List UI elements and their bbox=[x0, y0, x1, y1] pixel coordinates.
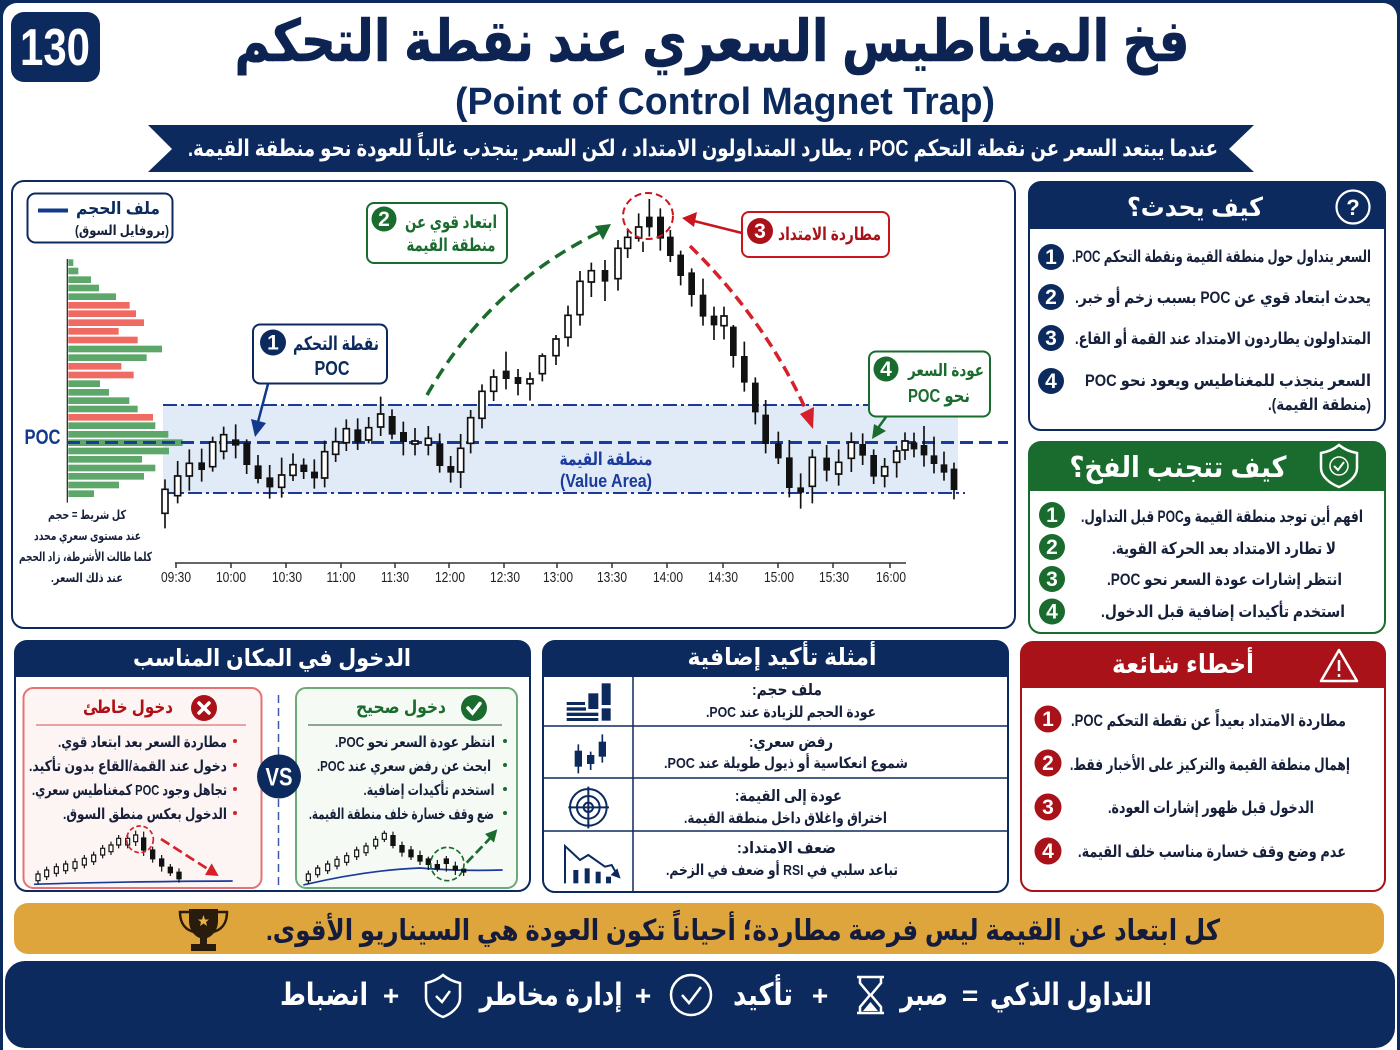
wrong entry card bbox=[24, 688, 262, 888]
item 2 bbox=[1038, 284, 1371, 310]
formula bar: التداول الذكي bbox=[990, 977, 1152, 1013]
profile note bbox=[19, 508, 153, 585]
formula bar: انضباط bbox=[280, 977, 368, 1012]
value area label: (Value Area) bbox=[560, 471, 652, 491]
callout 4: return towards POC: 4 bbox=[880, 358, 892, 381]
item 4 bbox=[1034, 838, 1346, 864]
header bbox=[1021, 642, 1385, 688]
item 3: 3 bbox=[1046, 568, 1058, 591]
wrong entry bullets: مطاردة السعر بعد ابتعاد قوي. bbox=[58, 734, 227, 752]
wrong entry mini chart bbox=[34, 826, 233, 884]
item 3: الدخول قبل ظهور إشارات العودة. bbox=[1108, 799, 1314, 818]
correct entry bullets bbox=[309, 734, 507, 823]
value area band bbox=[163, 405, 958, 493]
time axis: 11:00 bbox=[326, 570, 356, 586]
item 4: 4 bbox=[1042, 840, 1054, 863]
callout 2: strong move away: ابتعاد قوي عن bbox=[405, 212, 497, 233]
formula bar: تأكيد bbox=[733, 974, 793, 1012]
item 2: يحدث ابتعاد قوي عن POC بسبب زخم أو خبر. bbox=[1075, 287, 1371, 308]
row 4: weak extension: تباعد سلبي في RSI أو ضعف في الزخم. bbox=[666, 860, 898, 879]
row 1: volume profile bbox=[567, 682, 876, 721]
time axis: 14:00 bbox=[653, 570, 683, 586]
item 3 bbox=[1034, 794, 1314, 820]
row 4: weak extension: ضعف الامتداد: bbox=[737, 840, 836, 857]
value area label: منطقة القيمة bbox=[560, 449, 652, 469]
header bbox=[1029, 182, 1385, 229]
header: أخطاء شائعة bbox=[1112, 647, 1254, 679]
legend: volume profile: ملف الحجم bbox=[76, 199, 160, 218]
item 4 bbox=[1039, 598, 1345, 624]
formula bar: صبر bbox=[898, 977, 948, 1013]
callout 2: strong move away bbox=[367, 203, 507, 263]
row 1: volume profile: عودة الحجم للزيادة عند POC. bbox=[706, 704, 876, 721]
callout 1: POC: نقطة التحكم bbox=[293, 334, 379, 355]
panel: common mistakes bbox=[1021, 642, 1385, 891]
wrong entry bullets: تجاهل وجود POC كمغناطيس سعري. bbox=[32, 782, 227, 800]
row 3: return to value: عودة إلى القيمة: bbox=[735, 788, 842, 805]
POC line and value area boundaries bbox=[67, 405, 1008, 493]
callout 3: chasing the extension: 3 bbox=[754, 220, 766, 243]
header bbox=[1029, 442, 1385, 491]
profile note: كل شريط = حجم bbox=[48, 508, 127, 522]
item 1: 1 bbox=[1045, 246, 1057, 269]
row 2: price rejection: رفض سعري: bbox=[749, 734, 833, 752]
correct entry bullets: انتظر عودة السعر نحو POC. bbox=[335, 734, 495, 751]
correct entry mini chart bbox=[303, 829, 503, 885]
item 1 bbox=[1034, 706, 1346, 732]
correct entry bullets: ضع وقف خسارة خلف منطقة القيمة. bbox=[309, 806, 494, 823]
profile note: عند ذلك السعر. bbox=[51, 571, 123, 585]
time axis: 16:00 bbox=[876, 570, 906, 586]
volume profile bars bbox=[67, 259, 183, 503]
item 1: 1 bbox=[1046, 504, 1058, 527]
formula bar: + bbox=[635, 980, 651, 1011]
header bbox=[543, 641, 1008, 677]
row 3: return to value: اختراق واغلاق داخل منطقة القيمة. bbox=[684, 810, 887, 827]
item 4: السعر ينجذب للمغناطيس ويعود نحو POC bbox=[1085, 372, 1371, 391]
icon: check circle bbox=[671, 975, 711, 1015]
icon: shield bbox=[426, 975, 460, 1017]
time axis: 13:30 bbox=[597, 570, 627, 586]
subtitle: (Point of Control Magnet Trap) bbox=[455, 81, 995, 123]
formula bar: = bbox=[962, 980, 978, 1011]
candlestick chart: second half bbox=[515, 199, 957, 509]
arrow: green dashed rise bbox=[427, 224, 611, 395]
item 2 bbox=[1034, 750, 1350, 776]
row 4: weak extension bbox=[565, 840, 898, 883]
divider and VS badge bbox=[257, 695, 301, 885]
item 3 bbox=[1038, 325, 1371, 351]
banner ribbon: عندما يبتعد السعر عن نقطة التحكم POC ، يطارد المتداولون الامتداد ، لكن السعر ينجذب غالباً للعودة نحو منطقة القيمة. bbox=[188, 132, 1218, 162]
panel: enter in the right place bbox=[15, 641, 530, 891]
callout 4: return towards POC bbox=[869, 352, 990, 439]
header: كيف يحدث؟ bbox=[1127, 192, 1264, 222]
title: فخ المغناطيس السعري عند نقطة التحكم bbox=[234, 9, 1190, 76]
callout 4: return towards POC: نحو POC bbox=[908, 386, 970, 407]
time axis: 11:30 bbox=[381, 570, 409, 586]
time axis: 10:00 bbox=[216, 570, 246, 586]
callout 3: chasing the extension bbox=[682, 212, 889, 257]
wrong entry card: دخول خاطئ bbox=[83, 697, 173, 718]
callout 2: strong move away: منطقة القيمة bbox=[406, 235, 496, 255]
item 4: استخدم تأكيدات إضافية قبل الدخول. bbox=[1101, 601, 1345, 622]
time axis: 15:30 bbox=[819, 570, 849, 586]
divider and VS badge: VS bbox=[266, 764, 292, 792]
callout 2: strong move away: 2 bbox=[378, 208, 390, 231]
correct entry card: دخول صحيح bbox=[356, 697, 446, 718]
banner ribbon bbox=[148, 125, 1254, 172]
profile note: عند مستوى سعري محدد bbox=[34, 529, 141, 543]
item 1: 1 bbox=[1042, 708, 1054, 731]
callout 3: chasing the extension: مطاردة الامتداد bbox=[778, 224, 881, 244]
row 3: return to value bbox=[568, 787, 887, 828]
item 2: 2 bbox=[1042, 752, 1054, 775]
time axis bbox=[161, 563, 906, 586]
icon: hourglass bbox=[857, 977, 884, 1013]
item 4: (منطقة القيمة). bbox=[1268, 396, 1371, 414]
time axis: 14:30 bbox=[708, 570, 738, 586]
time axis: 12:30 bbox=[490, 570, 520, 586]
formula bar: إدارة مخاطر bbox=[478, 977, 622, 1013]
arrow: red dashed decline bbox=[690, 246, 814, 429]
time axis: 10:30 bbox=[272, 570, 302, 586]
row 2: price rejection bbox=[575, 734, 908, 773]
callout 1: POC: POC bbox=[314, 358, 350, 380]
correct entry bullets: استخدم تأكيدات إضافية. bbox=[364, 780, 494, 799]
panel: main chart bbox=[12, 181, 1015, 628]
gold takeaway bar bbox=[14, 903, 1384, 954]
icon: trophy bbox=[180, 909, 227, 951]
profile note: كلما طالت الأشرطة، زاد الحجم bbox=[19, 549, 153, 564]
header: كيف تتجنب الفخ؟ bbox=[1070, 452, 1287, 484]
item 2: 2 bbox=[1046, 536, 1058, 559]
item 1 bbox=[1038, 244, 1371, 270]
formula bar bbox=[5, 961, 1395, 1048]
time axis: 15:00 bbox=[764, 570, 794, 586]
panel: how does it happen bbox=[1029, 182, 1385, 430]
item 3 bbox=[1039, 566, 1342, 592]
item 2: 2 bbox=[1045, 286, 1057, 309]
panel: how to avoid the trap bbox=[1029, 442, 1385, 633]
time axis: 13:00 bbox=[543, 570, 573, 586]
item 3: 3 bbox=[1045, 327, 1057, 350]
extension peak dashed circle bbox=[623, 193, 673, 239]
value area label bbox=[560, 449, 652, 491]
wrong entry bullets: الدخول بعكس منطق السوق. bbox=[63, 806, 227, 823]
header: أمثلة تأكيد إضافية bbox=[688, 641, 876, 671]
legend: volume profile: (بروفايل السوق) bbox=[75, 223, 169, 238]
row 2: price rejection: شموع انعكاسية أو ذيول طويلة عند POC. bbox=[664, 753, 908, 772]
item 4 bbox=[1038, 368, 1371, 414]
formula bar: + bbox=[383, 980, 399, 1011]
item 4: 4 bbox=[1045, 370, 1057, 393]
wrong entry bullets bbox=[29, 734, 237, 823]
time axis: 12:00 bbox=[435, 570, 465, 586]
item 3: 3 bbox=[1042, 796, 1054, 819]
item 1: مطاردة الامتداد بعيداً عن نقطة التحكم POC. bbox=[1071, 708, 1346, 731]
item 2: لا تطارد الامتداد بعد الحركة القوية. bbox=[1112, 540, 1336, 559]
callout 1: POC bbox=[251, 324, 387, 437]
header bbox=[15, 641, 530, 677]
callout 4: return towards POC: عودة السعر bbox=[907, 361, 984, 381]
gold takeaway bar: كل ابتعاد عن القيمة ليس فرصة مطاردة؛ أحياناً تكون العودة هي السيناريو الأقوى. bbox=[266, 910, 1220, 947]
header: الدخول في المكان المناسب bbox=[133, 645, 411, 672]
item 1 bbox=[1039, 502, 1363, 528]
time axis: 09:30 bbox=[161, 570, 191, 586]
POC label: POC bbox=[24, 426, 60, 449]
item 2 bbox=[1039, 534, 1336, 560]
row 1: volume profile: ملف حجم: bbox=[752, 682, 822, 699]
item 3: انتظر إشارات عودة السعر نحو POC. bbox=[1107, 571, 1342, 590]
correct entry bullets: ابحث عن رفض سعري عند POC. bbox=[317, 758, 491, 776]
badge: 130: 130 bbox=[20, 19, 90, 77]
formula bar: + bbox=[812, 980, 828, 1011]
correct entry card bbox=[296, 688, 517, 888]
callout 1: POC: 1 bbox=[267, 332, 279, 354]
header: ? bbox=[1346, 195, 1360, 220]
candlestick chart: first half bbox=[162, 352, 510, 528]
item 4: 4 bbox=[1046, 600, 1058, 624]
wrong entry bullets: دخول عند القمة/القاع بدون تأكيد. bbox=[29, 756, 227, 775]
panel: extra confirmation examples bbox=[543, 641, 1008, 892]
legend: volume profile bbox=[28, 194, 172, 242]
